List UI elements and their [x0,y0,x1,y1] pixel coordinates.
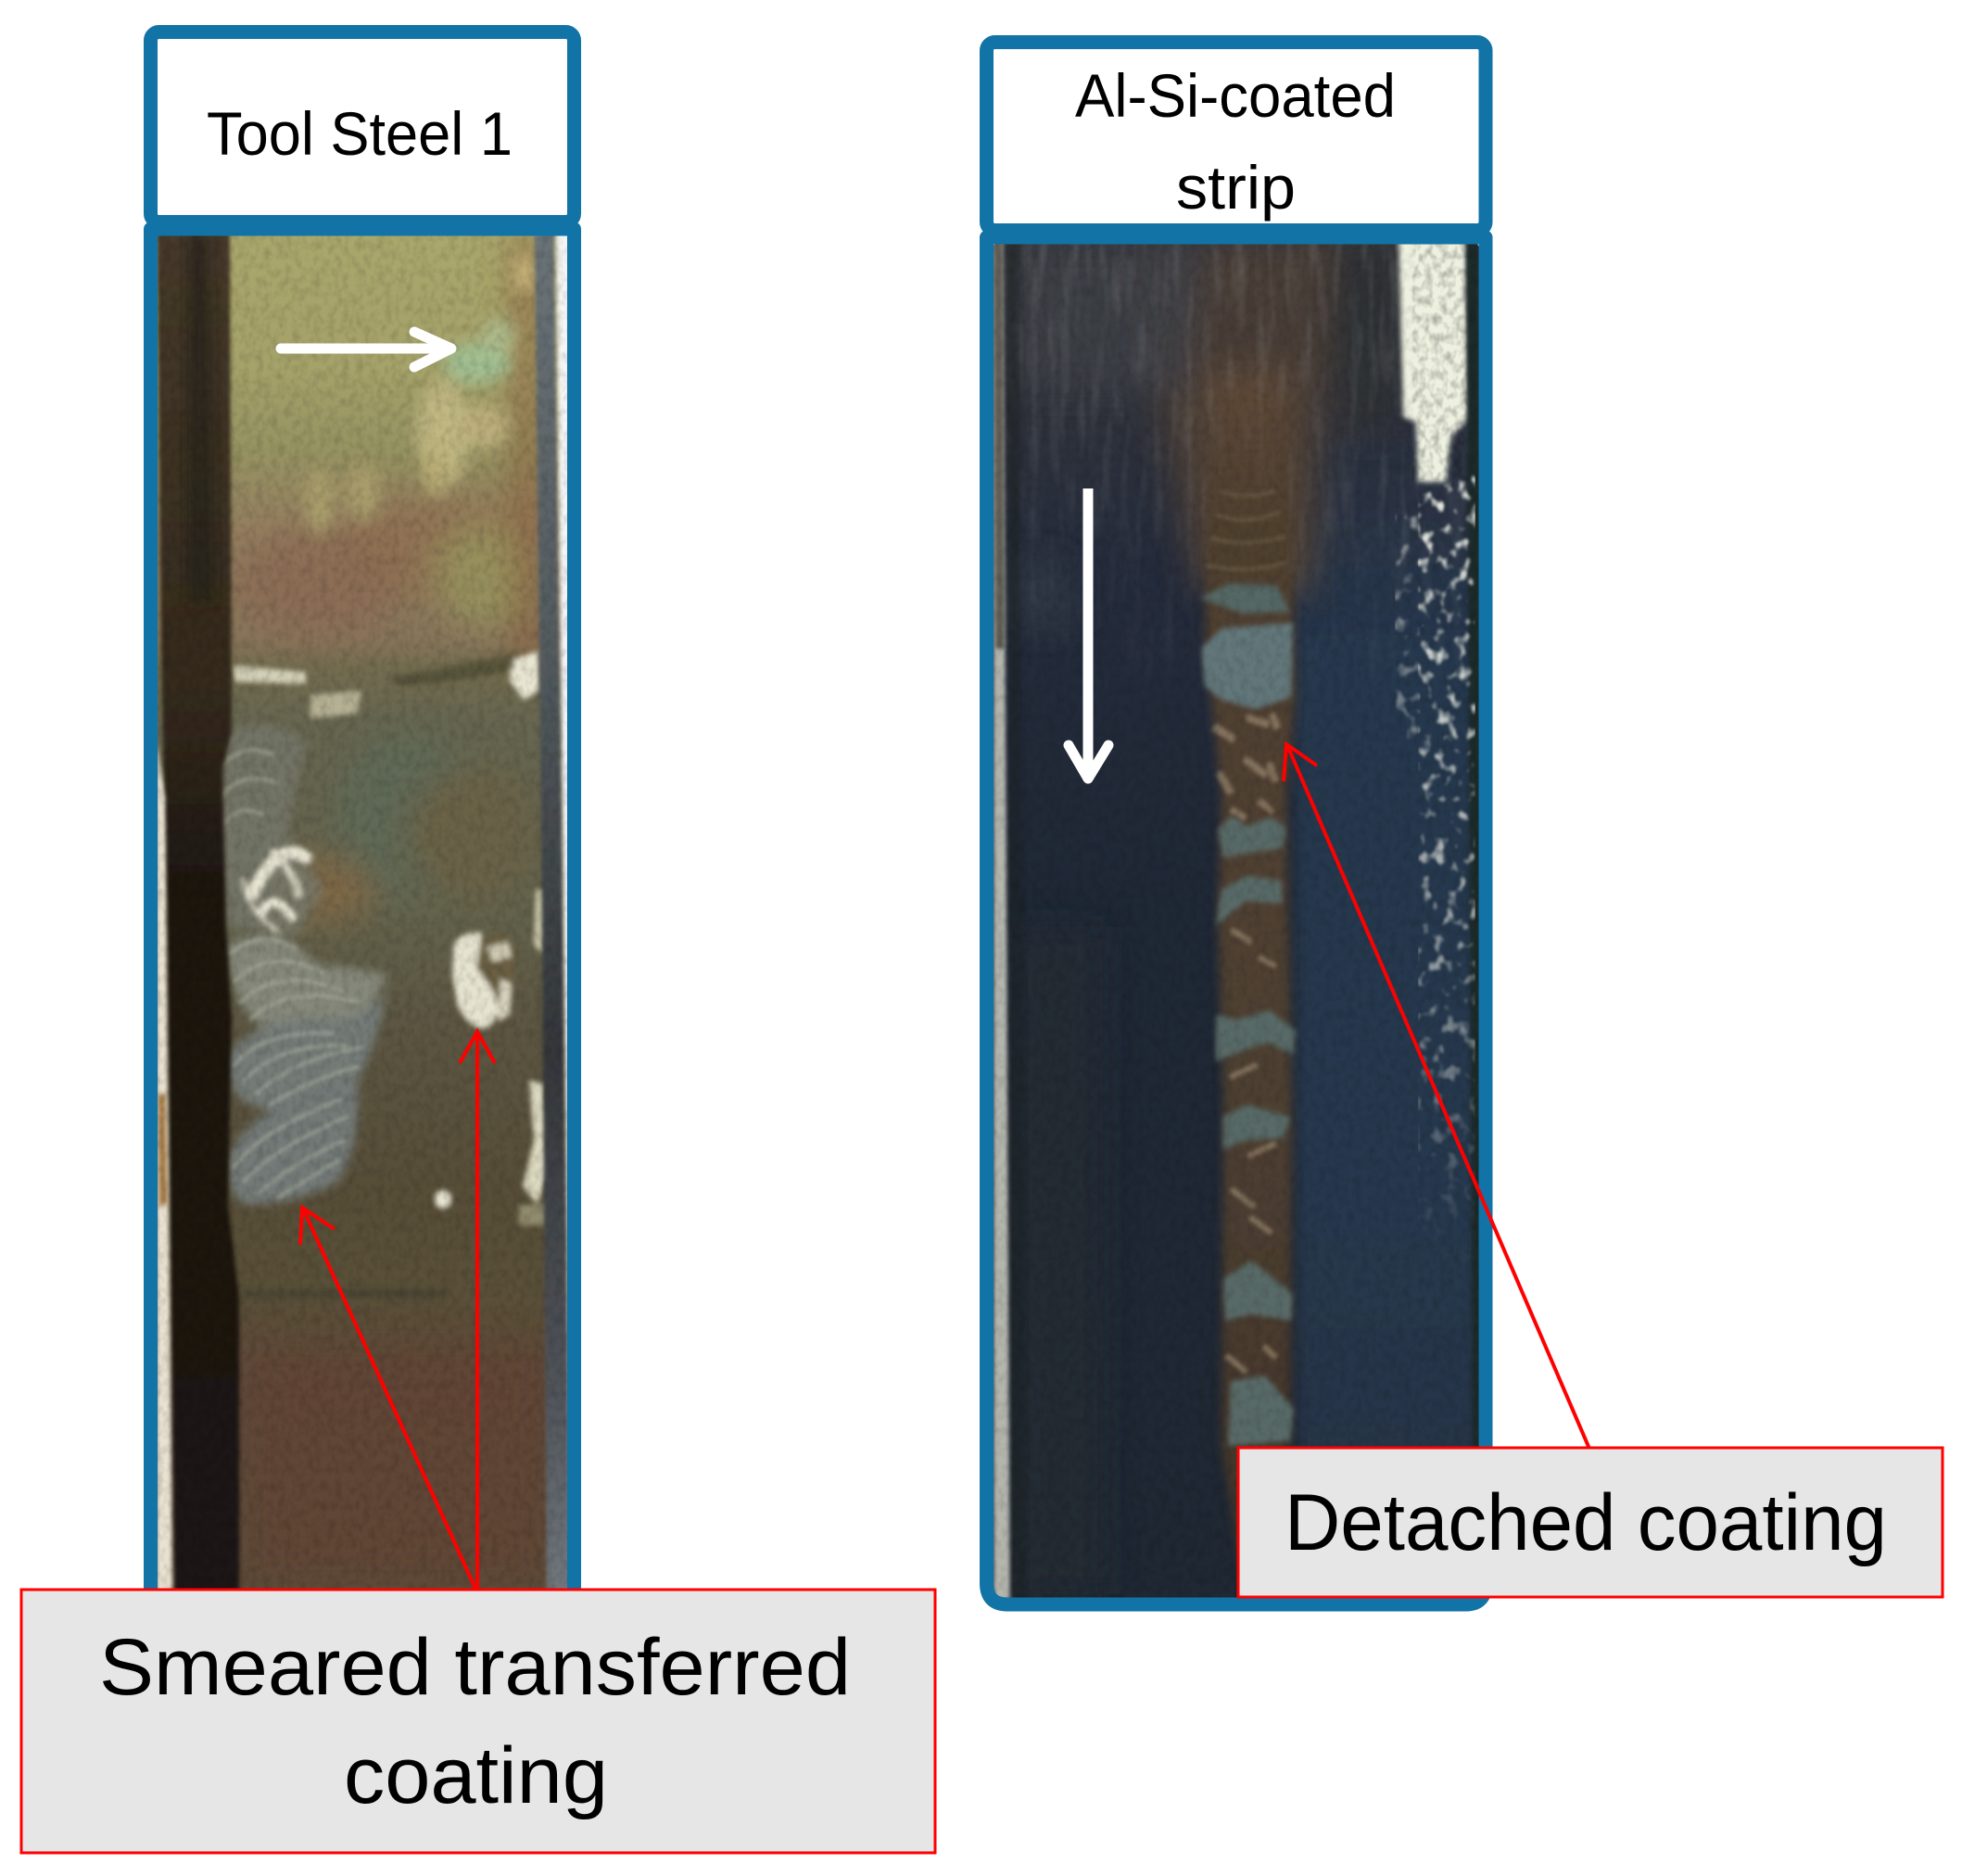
dark left edge band [157,232,239,1594]
gray coating remnants [1200,584,1296,1446]
arrow: red pointer to smeared weld scales [300,1208,476,1591]
pale left edge [157,742,172,1594]
callout: Smeared transferred coating [21,1590,935,1853]
frame: Al-Si-coated strip photo border [986,237,1486,1604]
arrow: white direction arrow, Tool Steel [281,332,451,367]
arrow: white direction arrow, strip [1069,488,1108,780]
callout: Smeared transferred coating: coating [344,1731,608,1820]
photo: Tool Steel 1 worn surface [157,232,571,1594]
blue-gray right edge band [535,232,571,1594]
frame: Tool Steel 1 photo border [150,229,575,1591]
callout: Smeared transferred coating: Smeared transferred [99,1623,851,1712]
central weld band [1205,399,1296,1600]
arrow: red pointer to detached coating [1284,744,1589,1449]
callout: Detached coating: Detached coating [1285,1478,1887,1567]
photo: Al-Si-coated strip [992,239,1483,1600]
header: Al-Si-coated strip: strip [1176,153,1296,222]
header: Tool Steel 1: Tool Steel 1 [207,99,513,168]
specular white streak [1399,239,1469,482]
callout: Detached coating [1238,1448,1943,1597]
specular speckles [1395,473,1475,1270]
left edge strips [994,239,1010,1600]
header: Al-Si-coated strip: Al-Si-coated [1075,61,1396,130]
arrow: red pointer to smeared patch [460,1032,495,1591]
header: Al-Si-coated strip [986,43,1486,230]
header: Tool Steel 1 [150,32,575,222]
